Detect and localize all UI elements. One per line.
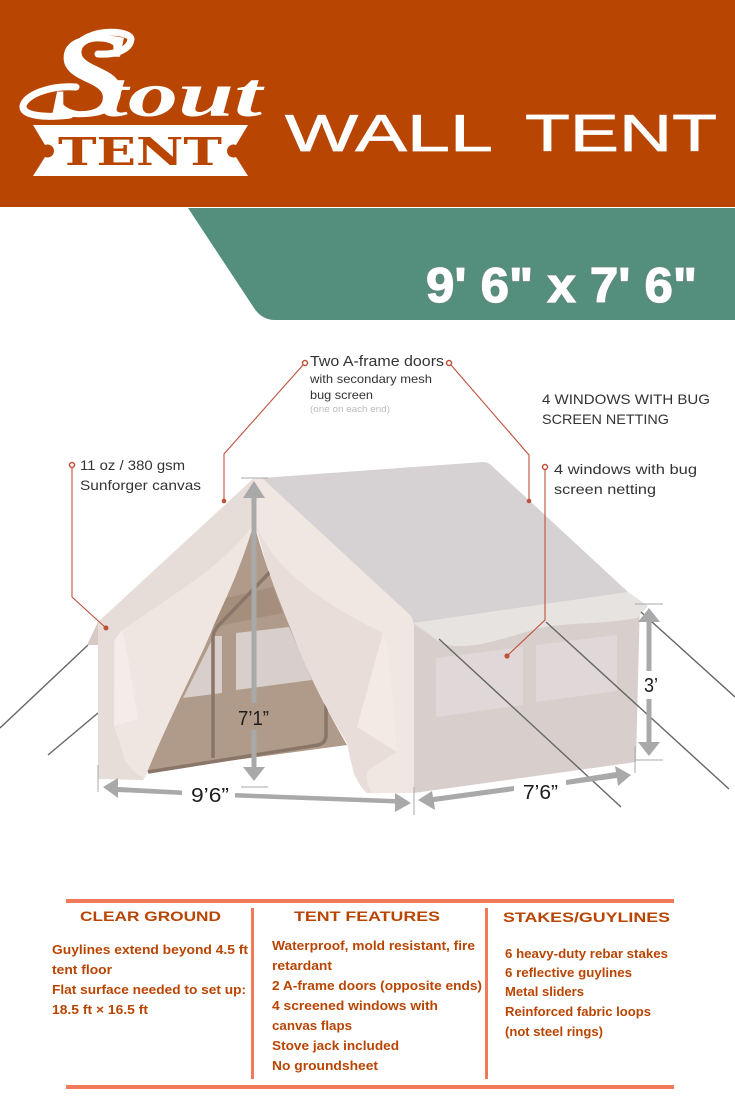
guylines behind tent <box>0 645 98 755</box>
tent illustration <box>0 462 735 807</box>
front wall left <box>98 478 254 780</box>
column: stakes and guylines: Metal sliders <box>505 984 584 999</box>
column: stakes and guylines: Reinforced fabric loops <box>505 1004 651 1019</box>
side windows <box>436 635 617 717</box>
column: clear ground: Flat surface needed to set up: <box>52 982 246 997</box>
logo: Stout Tent: S <box>50 8 130 143</box>
title: WALL <box>285 104 493 162</box>
tent roof <box>262 462 640 625</box>
door interior <box>147 523 347 772</box>
column: stakes and guylines <box>503 910 670 1039</box>
dimension: height 7'1" <box>238 478 269 787</box>
size banner <box>188 208 735 320</box>
size banner: 9' 6" x 7' 6" <box>426 259 697 313</box>
column: tent features: Waterproof, mold resistant, fire <box>272 938 475 953</box>
left door curtain <box>114 523 254 778</box>
guy flap <box>87 622 98 645</box>
column: tent features: 2 A-frame doors (opposite ends) <box>272 978 482 993</box>
info table <box>52 899 674 1089</box>
column: tent features: 4 screened windows with <box>272 998 438 1013</box>
callout: doors: (one on each end) <box>310 404 390 415</box>
callout: windows: screen netting <box>554 481 656 497</box>
column: tent features: retardant <box>272 958 333 973</box>
side valance <box>413 592 648 646</box>
callout: canvas <box>70 457 201 630</box>
column: clear ground: 18.5 ft × 16.5 ft <box>52 1002 149 1017</box>
callout: doors: bug screen <box>310 388 373 402</box>
column: stakes and guylines: 6 heavy-duty rebar stakes <box>505 946 668 961</box>
header band <box>0 0 735 207</box>
right curtain highlight <box>357 633 397 752</box>
column: tent features: No groundsheet <box>272 1058 379 1073</box>
column: tent features <box>272 909 482 1073</box>
column: stakes and guylines: (not steel rings) <box>505 1024 603 1039</box>
dimension: height 7'1": 7’1” <box>238 708 269 730</box>
logo: Stout Tent: TENT <box>58 129 222 174</box>
column: clear ground: tent floor <box>52 962 112 977</box>
column: tent features: canvas flaps <box>272 1018 352 1033</box>
callout: doors <box>222 353 531 503</box>
column: clear ground: Guylines extend beyond 4.5 ft <box>52 942 249 957</box>
callout: doors: Two A-frame doors <box>310 353 444 370</box>
column: tent features: TENT FEATURES <box>294 909 440 924</box>
dimension: wall height 3' <box>635 604 663 773</box>
callout: windows: 4 windows with bug <box>554 461 697 477</box>
column: stakes and guylines: STAKES/GUYLINES <box>503 910 670 925</box>
callout: canvas: 11 oz / 380 gsm <box>80 457 185 473</box>
note: windows uppercase: SCREEN NETTING <box>542 411 669 427</box>
tent poles <box>148 572 326 772</box>
left curtain highlight <box>114 630 138 726</box>
column: clear ground: CLEAR GROUND <box>80 909 221 924</box>
column: clear ground <box>52 909 249 1017</box>
dimension: width 9'6": 9’6” <box>191 785 229 807</box>
note: windows uppercase: 4 WINDOWS WITH BUG <box>542 391 710 407</box>
callout: canvas: Sunforger canvas <box>80 477 201 493</box>
guylines over side wall <box>439 612 735 807</box>
dimension: depth 7'6": 7’6” <box>523 782 558 804</box>
column: stakes and guylines: 6 reflective guylines <box>505 965 632 980</box>
column: tent features: Stove jack included <box>272 1038 399 1053</box>
title: TENT <box>525 104 717 162</box>
callout: doors: with secondary mesh <box>309 372 432 386</box>
dimension: depth 7'6" <box>418 766 631 810</box>
logo: Stout Tent <box>23 8 265 176</box>
front wall right <box>254 478 414 793</box>
logo: Stout Tent: tout <box>100 59 265 130</box>
dimension: wall height 3': 3’ <box>644 675 658 697</box>
callout: windows <box>504 461 697 659</box>
title <box>285 104 717 162</box>
note: windows uppercase <box>542 391 710 427</box>
right door curtain <box>257 527 397 793</box>
side wall <box>414 600 640 793</box>
dimension: width 9'6" <box>98 765 414 815</box>
